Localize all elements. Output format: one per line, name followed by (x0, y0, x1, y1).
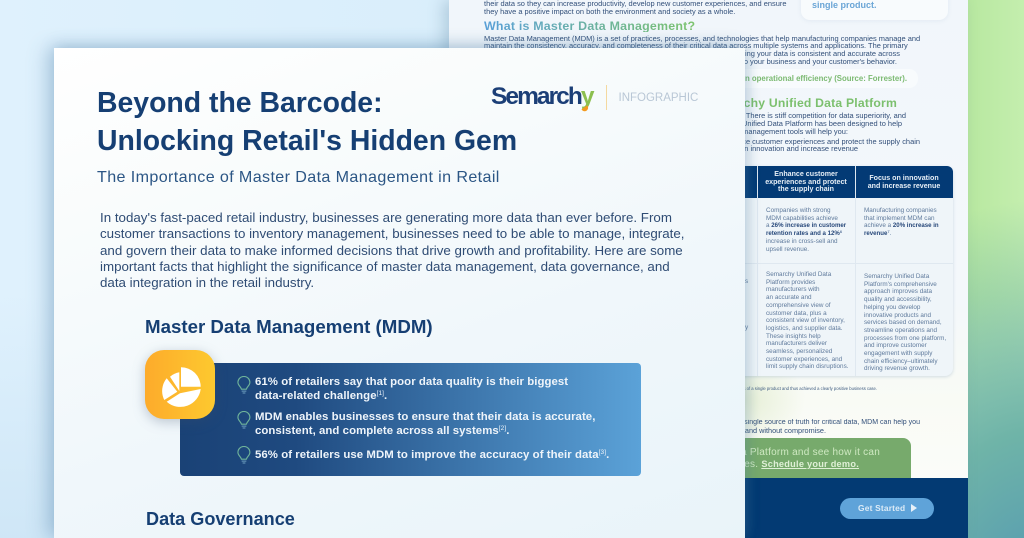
intro text: customer transactions to inventory management, businesses need to be able to manage, integrate, (100, 226, 685, 241)
cell: retention stats: Companies with strong (766, 207, 831, 214)
cell: first column fragments: s (745, 278, 748, 285)
green call to action: Semarchy Unified Data Platform and see how it can (639, 447, 880, 458)
title: Beyond the Barcode: (97, 87, 383, 119)
fact 2: MDM enables businesses to ensure that their data is accurate, (255, 411, 595, 423)
cell: data quality: Semarchy Unified Data (864, 273, 929, 280)
fact 1: 61% of retailers say that poor data quality is their biggest (255, 376, 568, 388)
logo tail accent (581, 105, 590, 113)
header: innovation: and increase revenue (868, 182, 940, 190)
footnote: the success of a single product and thus achieved a clearly positive business case. (723, 386, 877, 391)
fact 3: 56% of retailers use MDM to improve the accuracy of their data[3]. (255, 449, 609, 461)
cell: data quality: engagement with supply (864, 350, 932, 357)
cell: data quality: chain efficiency–ultimately (864, 358, 938, 365)
callout: operational efficiency (709, 69, 918, 88)
infographic label: INFOGRAPHIC (618, 92, 698, 104)
header: supply chain: the supply chain (778, 185, 834, 193)
cell: customer view: an accurate and (766, 294, 812, 301)
logo wordmark: Semarchy (491, 83, 593, 110)
intro text: data integration in the retail industry. (100, 275, 314, 290)
icon: bulb 1 (237, 376, 250, 394)
MDM paragraph: maintain the consistency, accuracy, and completeness of their critical data across multiple systems and applications. The primary (484, 41, 908, 50)
green call to action: your business priorities. Schedule your demo. (647, 459, 859, 470)
cell: retention stats: a 26% increase in customer (766, 222, 846, 229)
button: get started: Get Started (858, 503, 905, 513)
cell: data quality: driving revenue growth. (864, 365, 930, 372)
cell: revenue stats: that implement MDM can (864, 215, 935, 222)
cell: customer view: manufacturers with (766, 286, 820, 293)
intro text: In today's fast-paced retail industry, businesses are generating more data than ever before. From (100, 210, 672, 225)
cell: customer view: consistent view of inventory, (766, 317, 845, 324)
front page (54, 48, 745, 538)
cell: customer view (766, 271, 849, 370)
footer band (449, 478, 968, 538)
panel: MDM facts (180, 363, 641, 476)
cell: revenue stats (864, 207, 939, 237)
cell: data quality: and improve customer (864, 342, 927, 349)
cell: data quality: streamline operations and (864, 327, 937, 334)
intro text: and govern their data to make informed decisions that drive growth and profitability. Here are some (100, 242, 683, 258)
cell: data quality: Platform's comprehensive (864, 281, 937, 288)
platform paragraph: Focus on innovation and increase revenue (718, 144, 858, 153)
closing paragraph: grow faster and without compromise. (707, 426, 826, 435)
platform paragraph: Enhance customer experiences and protect the supply chain (721, 137, 920, 146)
cell: retention stats: increase in cross-sell and (766, 238, 838, 245)
title: Unlocking Retail's Hidden Gem (97, 125, 517, 157)
green call to action (689, 438, 911, 479)
fact 2: consistent, and complete across all systems[2]. (255, 425, 509, 437)
heading: what is MDM: What is Master Data Management? (484, 19, 695, 33)
cell: retention stats (766, 207, 846, 253)
cell: customer view: customer experiences, and (766, 356, 842, 363)
table (729, 166, 953, 376)
back page (449, 0, 968, 538)
cell: data quality: services based on demand, (864, 319, 942, 326)
header: supply chain: experiences and protect (765, 178, 847, 186)
heading: data governance: Data Governance (146, 509, 295, 529)
cell: customer view: customer data, plus a (766, 310, 827, 317)
intro paragraph: they have a positive impact on both the environment and society as a whole. (484, 7, 735, 16)
MDM paragraph: ensuring your data is consistent and accurate across (726, 49, 900, 58)
subtitle: The Importance of Master Data Management in Retail (97, 168, 500, 186)
cell: data quality: innovative products and (864, 312, 931, 319)
column dividers (757, 166, 758, 376)
cell: customer view: Platform provides (766, 279, 815, 286)
cell: revenue stats: revenue7. (864, 229, 891, 237)
logo divider (606, 85, 607, 110)
cell: customer view: manufacturers deliver (766, 340, 827, 347)
fact 1 (255, 376, 568, 402)
header: innovation (868, 174, 940, 190)
cell: data quality: processes from one platform, (864, 335, 946, 342)
cell: first column fragments: y (745, 324, 748, 331)
header: supply chain: Enhance customer (774, 170, 838, 178)
platform paragraph: Unified Data Platform has been designed to help (742, 119, 902, 128)
button: get started (840, 498, 934, 519)
MDM paragraph: insights into your business and your customer's behavior. (709, 57, 897, 66)
intro text (100, 210, 685, 290)
icon: pie chart tile (138, 346, 218, 428)
cell: retention stats: upsell revenue. (766, 246, 809, 253)
cell: retention stats: MDM capabilities achieve (766, 215, 838, 222)
header: supply chain (765, 170, 847, 193)
platform paragraph: There is stiff competition for data superiority, and (746, 111, 906, 120)
platform paragraph (718, 111, 920, 153)
MDM paragraph: Master Data Management (MDM) is a set of practices, processes, and technologies that help manufacturing companies manage and (484, 34, 920, 43)
callout: single product (801, 0, 948, 20)
cell: retention stats: retention rates and a 12%6 (766, 229, 842, 237)
cell: customer view: Semarchy Unified Data (766, 271, 831, 278)
table header (729, 166, 953, 198)
heading: MDM: Master Data Management (MDM) (145, 316, 433, 337)
cell: customer view: comprehensive view of (766, 302, 831, 309)
closing paragraph: As a single source of truth for critical data, MDM can help you (728, 419, 920, 426)
icon: bulb 3 (237, 446, 250, 464)
platform paragraph: management tools will help you: (742, 127, 848, 136)
cell: data quality: quality and accessibility, (864, 296, 932, 303)
cell: customer view: limit supply chain disruptions. (766, 363, 849, 370)
cell: customer view: seamless, personalized (766, 348, 832, 355)
callout: operational efficiency: in operational efficiency (Source: Forrester). (743, 74, 907, 83)
callout: single product: single product. (812, 0, 877, 10)
cell: data quality (864, 273, 946, 372)
MDM paragraph (484, 34, 920, 66)
intro text: important facts that highlight the significance of master data management, data governance, and (100, 259, 670, 274)
icon: bulb 2 (237, 411, 250, 428)
cell: first column fragments (745, 278, 748, 331)
logo: Semarchy (491, 83, 698, 112)
cell: data quality: approach improves data (864, 288, 932, 295)
closing paragraph (707, 419, 920, 435)
heading: unified data platform: Semarchy Unified Data Platform (705, 96, 897, 110)
intro paragraph (484, 0, 786, 16)
cell: customer view: logistics, and supplier data. (766, 325, 843, 332)
cell: revenue stats: Manufacturing companies (864, 207, 937, 214)
cell: data quality: helping you develop (864, 304, 920, 311)
cell: customer view: These insights help (766, 333, 821, 340)
title (97, 87, 517, 157)
cell: revenue stats: achieve a 20% increase in (864, 222, 939, 229)
header: innovation: Focus on innovation (869, 174, 939, 182)
fact 2 (255, 411, 595, 437)
fact 1: data-related challenge[1]. (255, 390, 387, 402)
